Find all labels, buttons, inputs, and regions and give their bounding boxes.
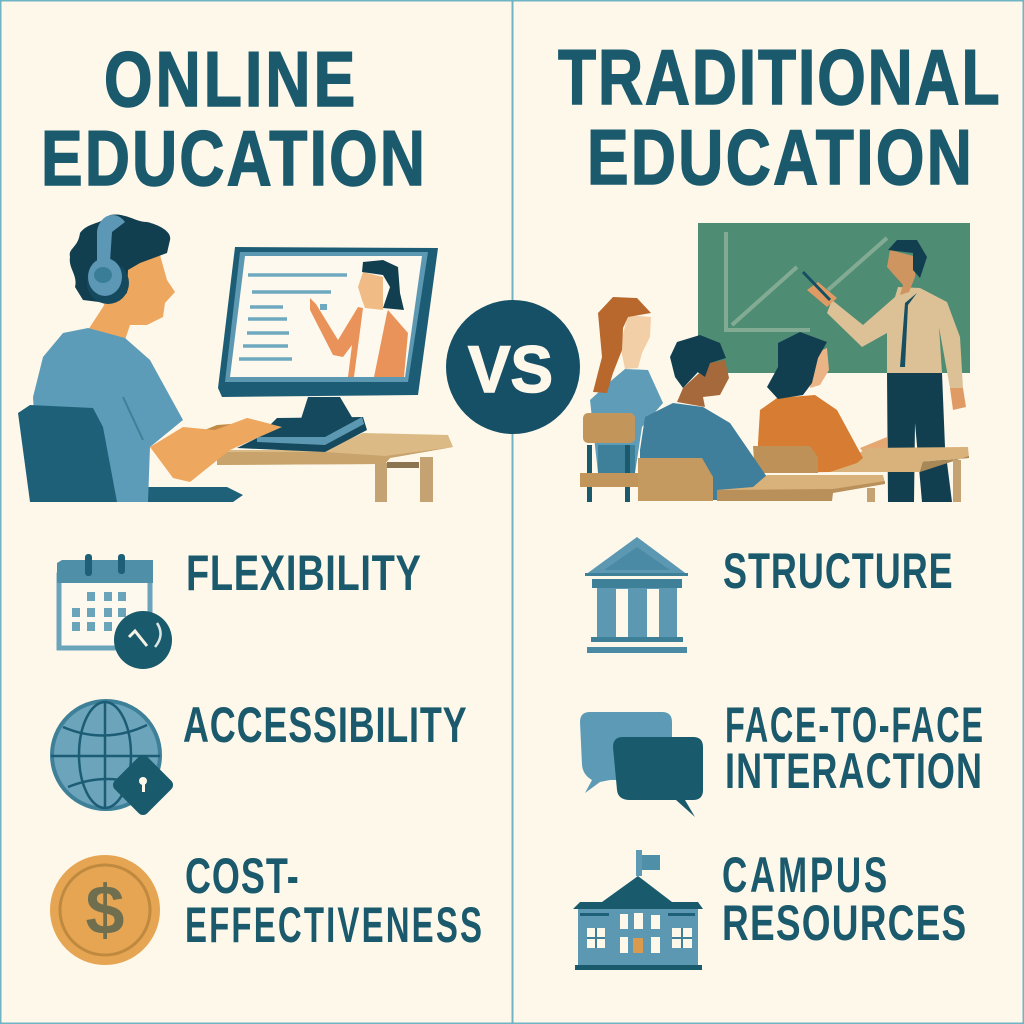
title: traditional education xyxy=(558,33,1000,201)
feature: cost-effectiveness: COST- xyxy=(185,849,299,904)
icon: calendar and clock xyxy=(57,554,172,669)
chair back xyxy=(18,405,117,502)
hand over keyboard xyxy=(225,418,282,445)
icon: institution building xyxy=(585,537,688,653)
feature: accessibility: ACCESSIBILITY xyxy=(183,698,467,753)
student 1 xyxy=(580,297,663,502)
feature: structure: STRUCTURE xyxy=(723,544,953,599)
feature: accessibility xyxy=(51,698,467,809)
title: online education: EDUCATION xyxy=(41,114,425,202)
desk xyxy=(217,433,453,502)
feature: flexibility xyxy=(57,546,421,669)
keyboard xyxy=(237,417,367,452)
right desk xyxy=(830,447,969,502)
feature: structure xyxy=(585,537,953,653)
feature: cost-effectiveness: EFFECTIVENESS xyxy=(185,897,482,953)
student 3 hand xyxy=(860,437,887,458)
title: online education: ONLINE xyxy=(104,35,355,123)
feature: campus resources: CAMPUS xyxy=(722,848,887,904)
feature: face-to-face interaction: FACE-TO-FACE xyxy=(725,697,983,753)
arm xyxy=(150,418,282,482)
VS badge: VS xyxy=(468,332,553,406)
hair xyxy=(70,214,170,303)
feature: face-to-face interaction: INTERACTION xyxy=(725,744,982,799)
student neck and face xyxy=(88,255,175,340)
illustration: online student at computer xyxy=(18,214,453,502)
illustration: traditional classroom xyxy=(580,223,970,502)
feature: campus resources xyxy=(573,848,966,970)
icon: speech bubbles xyxy=(580,712,703,817)
headphones xyxy=(87,215,129,304)
chalkboard xyxy=(698,223,970,373)
feature: campus resources: RESOURCES xyxy=(722,896,966,951)
feature: flexibility: FLEXIBILITY xyxy=(186,546,421,601)
title: traditional education: TRADITIONAL xyxy=(558,33,1000,121)
student 2 xyxy=(638,335,767,501)
chair base xyxy=(148,487,243,502)
VS badge xyxy=(446,300,580,434)
icon: globe with lock xyxy=(51,701,167,809)
title: traditional education: EDUCATION xyxy=(587,113,972,201)
icon: dollar coin xyxy=(50,855,160,965)
front desk xyxy=(717,475,885,502)
teacher xyxy=(803,240,966,502)
title: online education xyxy=(41,35,425,202)
feature: cost-effectiveness xyxy=(50,849,482,965)
icon: dollar coin: $ xyxy=(86,871,124,949)
student 3 xyxy=(753,332,863,473)
student shirt xyxy=(33,328,183,502)
feature: face-to-face interaction xyxy=(580,697,983,817)
monitor xyxy=(218,247,438,422)
icon: campus building xyxy=(573,850,703,970)
